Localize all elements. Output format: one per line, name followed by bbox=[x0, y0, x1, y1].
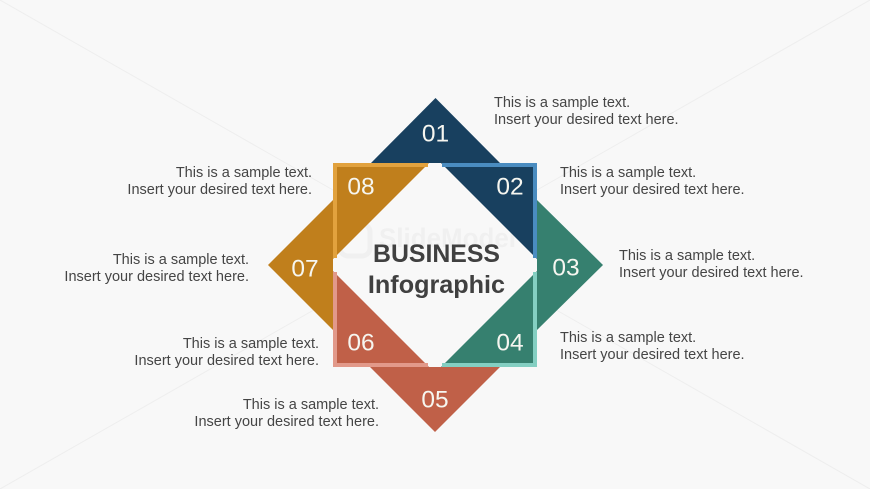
text 06 bbox=[134, 336, 319, 369]
watermark: SlideModel bbox=[379, 223, 516, 253]
text 02: This is a sample text. bbox=[560, 165, 696, 181]
triangle 07: 07 bbox=[291, 256, 319, 282]
triangle 05: 05 bbox=[421, 386, 449, 414]
text 05: Insert your desired text here. bbox=[194, 414, 379, 430]
text 03: This is a sample text. bbox=[619, 248, 755, 264]
center title: BUSINESS bbox=[373, 240, 500, 268]
text 04 bbox=[560, 330, 745, 363]
text 01: This is a sample text. bbox=[494, 95, 630, 111]
text 04: Insert your desired text here. bbox=[560, 347, 745, 363]
text 04: This is a sample text. bbox=[560, 330, 696, 346]
center title bbox=[368, 240, 505, 299]
corner 02: 02 bbox=[496, 174, 524, 200]
text 08: Insert your desired text here. bbox=[127, 182, 312, 198]
text 08: This is a sample text. bbox=[176, 165, 312, 181]
text 01: Insert your desired text here. bbox=[494, 112, 679, 128]
triangle 03: 03 bbox=[552, 254, 580, 282]
text 08 bbox=[127, 165, 312, 198]
text 06: This is a sample text. bbox=[183, 336, 319, 352]
text 03: Insert your desired text here. bbox=[619, 265, 804, 281]
triangle 05 bbox=[370, 367, 500, 432]
corner 06: 06 bbox=[347, 330, 375, 356]
text 06: Insert your desired text here. bbox=[134, 353, 319, 369]
text 05: This is a sample text. bbox=[243, 397, 379, 413]
text 01 bbox=[494, 95, 679, 128]
text 03 bbox=[619, 248, 804, 281]
watermark bbox=[340, 223, 516, 256]
triangle 01 bbox=[371, 98, 500, 163]
triangle 01: 01 bbox=[422, 120, 449, 148]
corner 04: 04 bbox=[496, 330, 524, 356]
center title: Infographic bbox=[368, 271, 505, 299]
corner 08 bbox=[333, 163, 429, 259]
text 07: This is a sample text. bbox=[113, 252, 249, 268]
corner 08: 08 bbox=[347, 174, 375, 200]
text 07: Insert your desired text here. bbox=[64, 269, 249, 285]
corner 02 bbox=[441, 163, 537, 259]
text 02: Insert your desired text here. bbox=[560, 182, 745, 198]
corner 04 bbox=[441, 271, 537, 367]
triangle 07 bbox=[268, 200, 333, 330]
corner 06 bbox=[333, 271, 429, 367]
text 05 bbox=[194, 397, 379, 430]
triangle 03 bbox=[537, 200, 603, 330]
text 07 bbox=[64, 252, 249, 285]
text 02 bbox=[560, 165, 745, 198]
